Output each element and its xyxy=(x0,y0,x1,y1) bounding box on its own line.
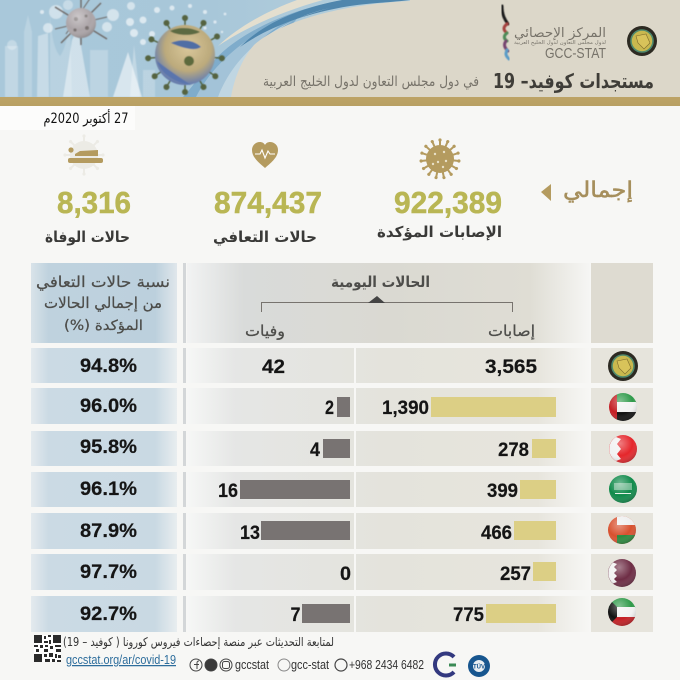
social icons xyxy=(190,659,232,671)
table header panels xyxy=(31,263,653,343)
GCC-STAT logo xyxy=(502,6,657,62)
header: recovery rate: من إجمالي الحالات xyxy=(44,294,162,313)
flag: Saudi Arabia xyxy=(609,475,637,503)
row: GCC: 94.8% xyxy=(80,356,137,377)
row: Oman: 13 xyxy=(240,523,260,544)
icon: heart xyxy=(252,142,278,168)
row: Qatar: 97.7% xyxy=(80,562,137,583)
header: deaths: وفيات xyxy=(245,322,285,340)
row: Bahrain: 278 xyxy=(498,440,529,461)
row: UAE: 2 xyxy=(325,398,334,419)
decorative dots xyxy=(40,0,226,45)
label: الإصابات المؤكدة xyxy=(377,223,502,241)
value: 922,389 xyxy=(394,185,502,220)
row: Kuwait xyxy=(31,596,653,632)
icon: threads xyxy=(278,659,290,671)
flag: Kuwait xyxy=(608,598,636,627)
logo: TUV xyxy=(468,655,490,677)
row: GCC: 3,565 xyxy=(485,357,537,378)
row: Saudi Arabia: 16 xyxy=(218,481,238,502)
row: UAE: 96.0% xyxy=(80,396,137,417)
logo ribbon xyxy=(502,6,509,59)
logo: G certificate xyxy=(435,654,456,676)
skyline illustration xyxy=(5,15,155,97)
small grey virus xyxy=(55,0,107,45)
swoosh bands xyxy=(183,0,410,97)
handle: gccstat: gccstat xyxy=(235,658,269,672)
row: Saudi Arabia: 96.1% xyxy=(80,479,137,500)
row: Kuwait: 775 xyxy=(453,605,484,626)
footer xyxy=(34,635,490,677)
value: 8,316 xyxy=(57,185,131,220)
row: Kuwait: 92.7% xyxy=(80,604,137,625)
label: total: إجمالي xyxy=(563,178,633,203)
subtitle: في دول مجلس التعاون لدول الخليج العربية xyxy=(263,74,479,90)
beige panel xyxy=(231,0,680,97)
row: Oman: 87.9% xyxy=(80,521,137,542)
footer message: لمتابعة التحديثات عبر منصة إحصاءات فيروس كورونا ( كوفيد – 19) xyxy=(63,635,334,650)
icon: whatsapp xyxy=(335,659,347,671)
header banner xyxy=(0,0,680,97)
header: daily cases: الحالات اليومية xyxy=(331,273,430,291)
QR code xyxy=(34,635,61,662)
logo Arabic name: المركز الإحصائي xyxy=(514,26,606,41)
header: daily cases xyxy=(262,273,512,312)
GCC seal xyxy=(627,26,657,56)
icon: virus xyxy=(419,138,461,179)
gold band xyxy=(0,97,680,106)
flag: Oman xyxy=(608,516,636,545)
date: 27 أكتوبر 2020م xyxy=(44,109,128,127)
row: Oman xyxy=(31,513,653,549)
value: 874,437 xyxy=(214,185,322,220)
header: recovery rate: نسبة حالات التعافي xyxy=(36,273,170,292)
header: recovery rate xyxy=(36,273,170,334)
total section label xyxy=(541,178,633,203)
stat: confirmed cases xyxy=(377,138,502,241)
icon: bed with virus xyxy=(63,134,105,176)
label: حالات الوفاة xyxy=(45,228,130,246)
row: Bahrain: 95.8% xyxy=(80,437,137,458)
flag: UAE xyxy=(609,393,637,422)
row: Oman: 466 xyxy=(481,523,512,544)
row: UAE xyxy=(31,388,653,424)
row: Saudi Arabia xyxy=(31,472,653,507)
flag: Bahrain xyxy=(609,435,637,463)
globe with virus spikes xyxy=(145,15,225,95)
arrow xyxy=(541,184,551,201)
phone: +968 2434 6482 xyxy=(349,658,424,672)
label: حالات التعافي xyxy=(213,228,317,246)
logo: TUV: TÜV xyxy=(473,664,485,670)
row: Qatar xyxy=(31,554,653,590)
flag: GCC xyxy=(608,351,638,381)
row: Qatar: 0 xyxy=(340,564,351,585)
header: recovery rate: المؤكدة (%) xyxy=(64,318,143,334)
link: gccstat.org/ar/covid-19 xyxy=(66,653,176,667)
row: Kuwait: 7 xyxy=(290,605,300,626)
date background xyxy=(0,106,135,130)
logo GCC-STAT: GCC-STAT xyxy=(545,45,606,62)
flag: Qatar xyxy=(608,559,636,587)
logo Arabic subtitle: لدول مجلس التعاون لدول الخليج العربية xyxy=(514,40,607,46)
stat: deaths xyxy=(45,134,131,246)
row: GCC xyxy=(31,348,653,383)
handle: gcc-stat: gcc-stat xyxy=(291,658,329,672)
row: UAE: 1,390 xyxy=(382,398,429,419)
data table xyxy=(31,263,653,632)
row: GCC: 42 xyxy=(262,357,285,378)
row: Saudi Arabia: 399 xyxy=(487,481,518,502)
stat: recoveries xyxy=(213,142,322,246)
row: Bahrain: 4 xyxy=(310,440,320,461)
row: Qatar: 257 xyxy=(500,564,531,585)
header: cases: إصابات xyxy=(488,322,535,340)
row: Bahrain xyxy=(31,431,653,466)
